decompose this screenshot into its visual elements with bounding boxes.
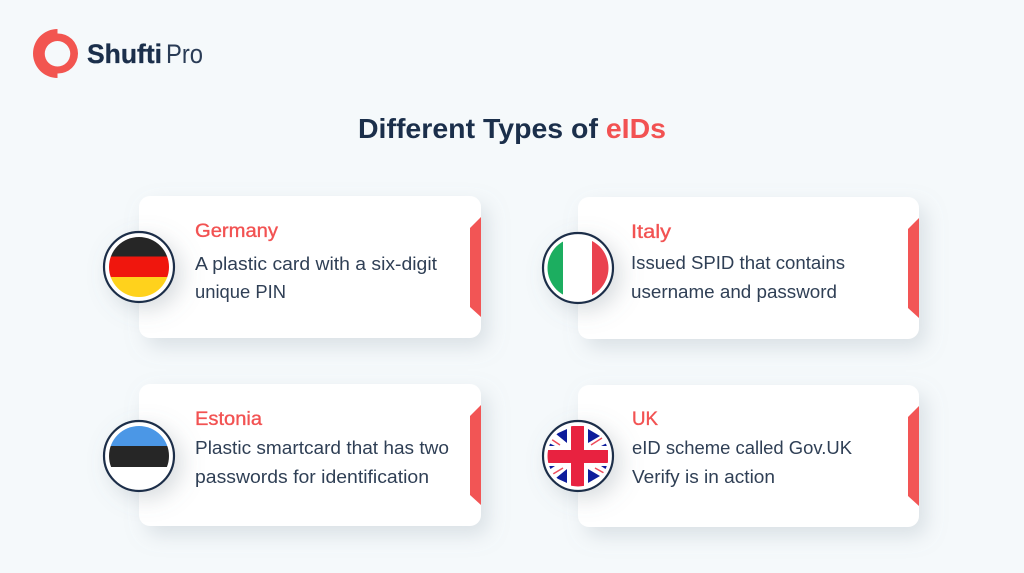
icon: UK flag bbox=[543, 421, 613, 491]
card background bbox=[139, 384, 481, 526]
panel: Estonia bbox=[104, 384, 481, 526]
logo: Shufti Pro bbox=[33, 29, 203, 78]
description: Germany: unique PIN bbox=[195, 282, 286, 302]
description: Estonia: Plastic smartcard that has two bbox=[195, 438, 449, 458]
red tab bbox=[908, 218, 919, 318]
panel: Germany bbox=[104, 196, 481, 338]
icon: German flag bbox=[104, 232, 174, 302]
heading: Germany: Germany bbox=[195, 221, 279, 242]
heading: UK: UK bbox=[632, 409, 658, 430]
logo wordmark: Pro: Pro bbox=[166, 39, 203, 69]
icon: Italian flag bbox=[543, 233, 613, 303]
icon: Estonian flag bbox=[104, 421, 174, 491]
icon: logo ring bbox=[33, 29, 78, 78]
card background bbox=[578, 197, 919, 339]
description: Italy: username and password bbox=[631, 282, 837, 302]
description: UK: Verify is in action bbox=[632, 467, 775, 487]
description: Estonia: passwords for identification bbox=[195, 467, 429, 487]
card background bbox=[578, 385, 919, 527]
heading: Estonia: Estonia bbox=[195, 409, 262, 430]
title: Different Types of eIDs bbox=[358, 113, 666, 144]
card background bbox=[139, 196, 481, 338]
panel: Italy bbox=[543, 197, 919, 339]
red tab bbox=[470, 405, 481, 505]
heading: Italy: Italy bbox=[631, 222, 672, 243]
panel: UK bbox=[543, 385, 919, 527]
description: Germany: A plastic card with a six-digit bbox=[195, 254, 437, 274]
red tab bbox=[908, 406, 919, 506]
description: UK: eID scheme called Gov.UK bbox=[632, 438, 852, 458]
logo wordmark: Shufti: Shufti bbox=[87, 39, 162, 69]
red tab bbox=[470, 217, 481, 317]
description: Italy: Issued SPID that contains bbox=[631, 253, 845, 273]
